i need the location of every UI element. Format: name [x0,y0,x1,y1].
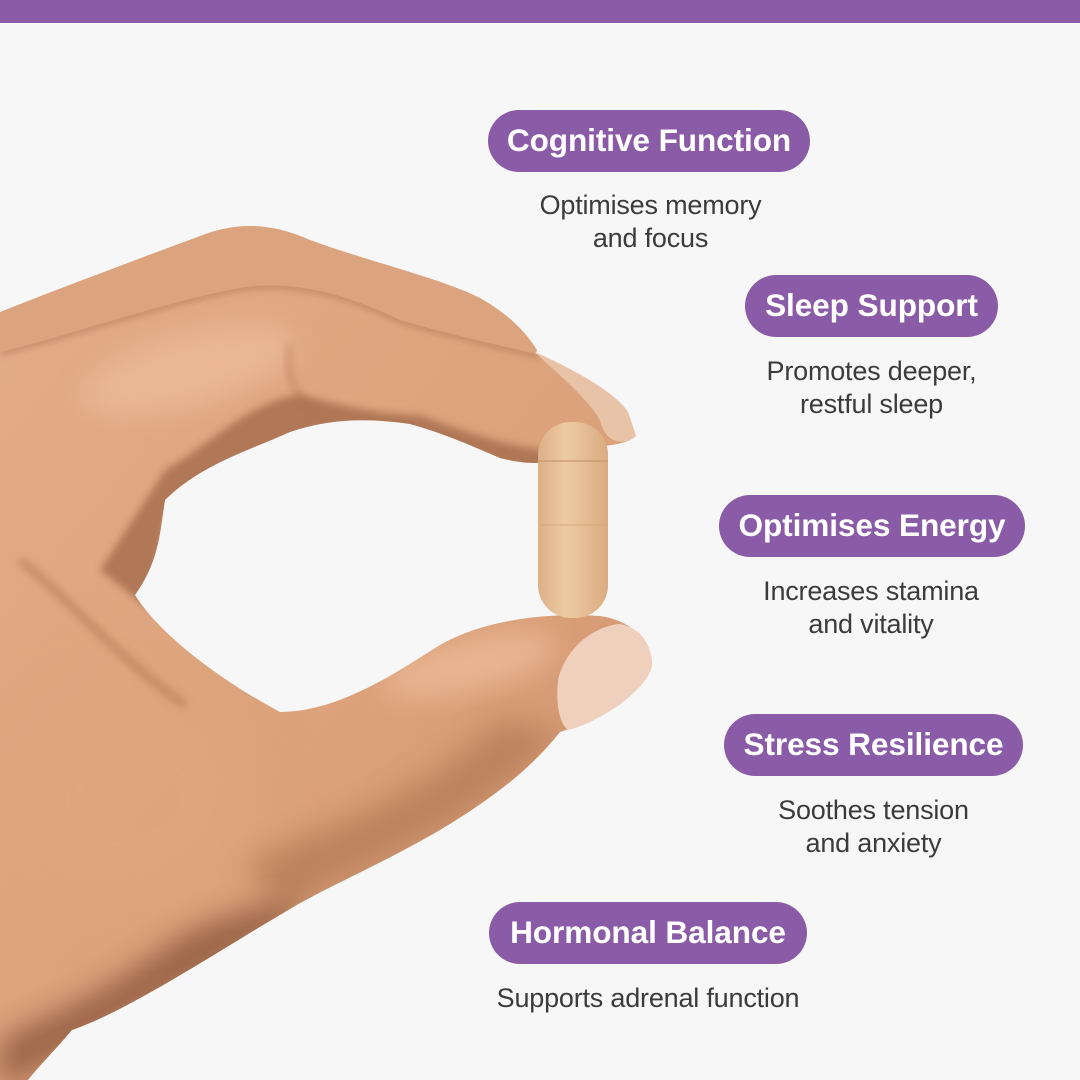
pill heading: Stress Resilience [744,726,1003,762]
thumbnail [557,624,652,730]
description: and vitality [808,609,934,639]
underside shadow of the finger [100,395,545,610]
index fingernail [535,352,636,442]
benefit: hormonal balance [489,902,807,1013]
pill heading: Hormonal Balance [510,914,786,950]
seam shadow below rear finger [0,285,540,355]
lower hand shadow [0,900,300,1080]
description: and anxiety [806,828,941,858]
benefit: stress resilience [724,714,1023,858]
pill heading [488,110,810,172]
description: Soothes tension [778,795,969,825]
hand and thumb [0,270,680,1080]
palm warm patch [0,690,260,910]
highlight on finger [90,324,292,415]
pill heading [719,495,1025,557]
thumb highlight [386,626,556,704]
description [767,356,976,419]
pill heading: Optimises Energy [738,507,1006,543]
description: restful sleep [800,389,943,419]
capsule [538,422,608,618]
description [540,190,762,253]
pill heading [489,902,807,964]
description: Optimises memory [540,190,761,220]
palm crease [20,560,185,705]
pill heading [724,714,1023,776]
finger crease [284,346,302,395]
benefit: optimises energy [719,495,1025,639]
rear index finger [0,226,537,420]
benefit: sleep support [745,275,998,419]
pill heading: Sleep Support [765,287,978,323]
description: Increases stamina [763,576,979,606]
pill heading: Cognitive Function [507,122,791,158]
description: Promotes deeper, [767,356,976,386]
description [763,576,979,639]
description: and focus [593,223,708,253]
description [778,795,969,858]
thumb underside shading [240,720,560,912]
description: Supports adrenal function [497,983,799,1013]
pill heading [745,275,998,337]
benefit: cognitive function [488,110,810,253]
top purple band [0,0,1080,23]
photo: hand holding capsule [0,226,652,1080]
